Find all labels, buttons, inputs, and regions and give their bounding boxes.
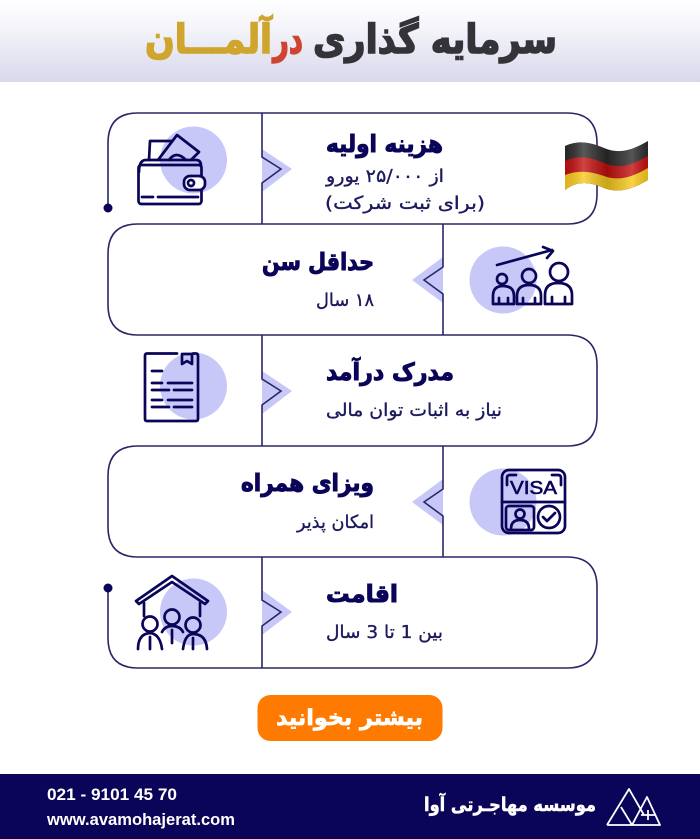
heading: مدرک درآمد [326,357,454,386]
text block: امکان پذیر [296,512,374,533]
panel: companion visa [241,468,565,536]
text block: نیاز به اثبات توان مالی [326,400,502,421]
phone number: 021 - 9101 45 70 [47,785,177,804]
title: آلمـــان [145,14,273,63]
website: www.avamohajerat.com [46,810,235,829]
heading: حداقل سن [262,248,374,276]
panel: proof of income [145,352,502,421]
icon: visa card [470,468,565,536]
heading: اقامت [326,580,398,608]
timeline start dot [104,204,112,212]
icon: wallet [138,126,227,204]
title: در [272,17,303,63]
institute name: موسسه مهاجـرتی آوا [424,792,596,816]
header band [0,0,700,82]
title [145,14,557,63]
button: بیشتر بخوانید [276,706,423,731]
text block: از ۲۵/۰۰۰ یورو [325,166,444,187]
serpentine timeline outline [108,113,597,668]
icon: document [145,352,227,421]
heading: ویزای همراه [241,469,374,497]
light chevrons [262,149,443,635]
panel: residency [136,576,443,649]
text block [325,166,485,214]
panel: initial cost [138,126,485,214]
icon: people with arrow [470,246,572,314]
logo [607,789,660,825]
icon: German flag [565,141,648,190]
button [258,695,442,741]
text block: (برای ثبت شرکت) [325,193,485,214]
panel: minimum age [262,246,572,314]
title: سرمایه گذاری [313,16,557,63]
heading: هزینه اولیه [326,130,443,158]
footer [0,774,700,839]
icon: family under roof [136,576,227,649]
timeline end dot [104,584,112,592]
text block: بین 1 تا 3 سال [326,622,443,643]
text block: ۱۸ سال [316,290,374,311]
icon: visa card: VISA [510,478,557,498]
